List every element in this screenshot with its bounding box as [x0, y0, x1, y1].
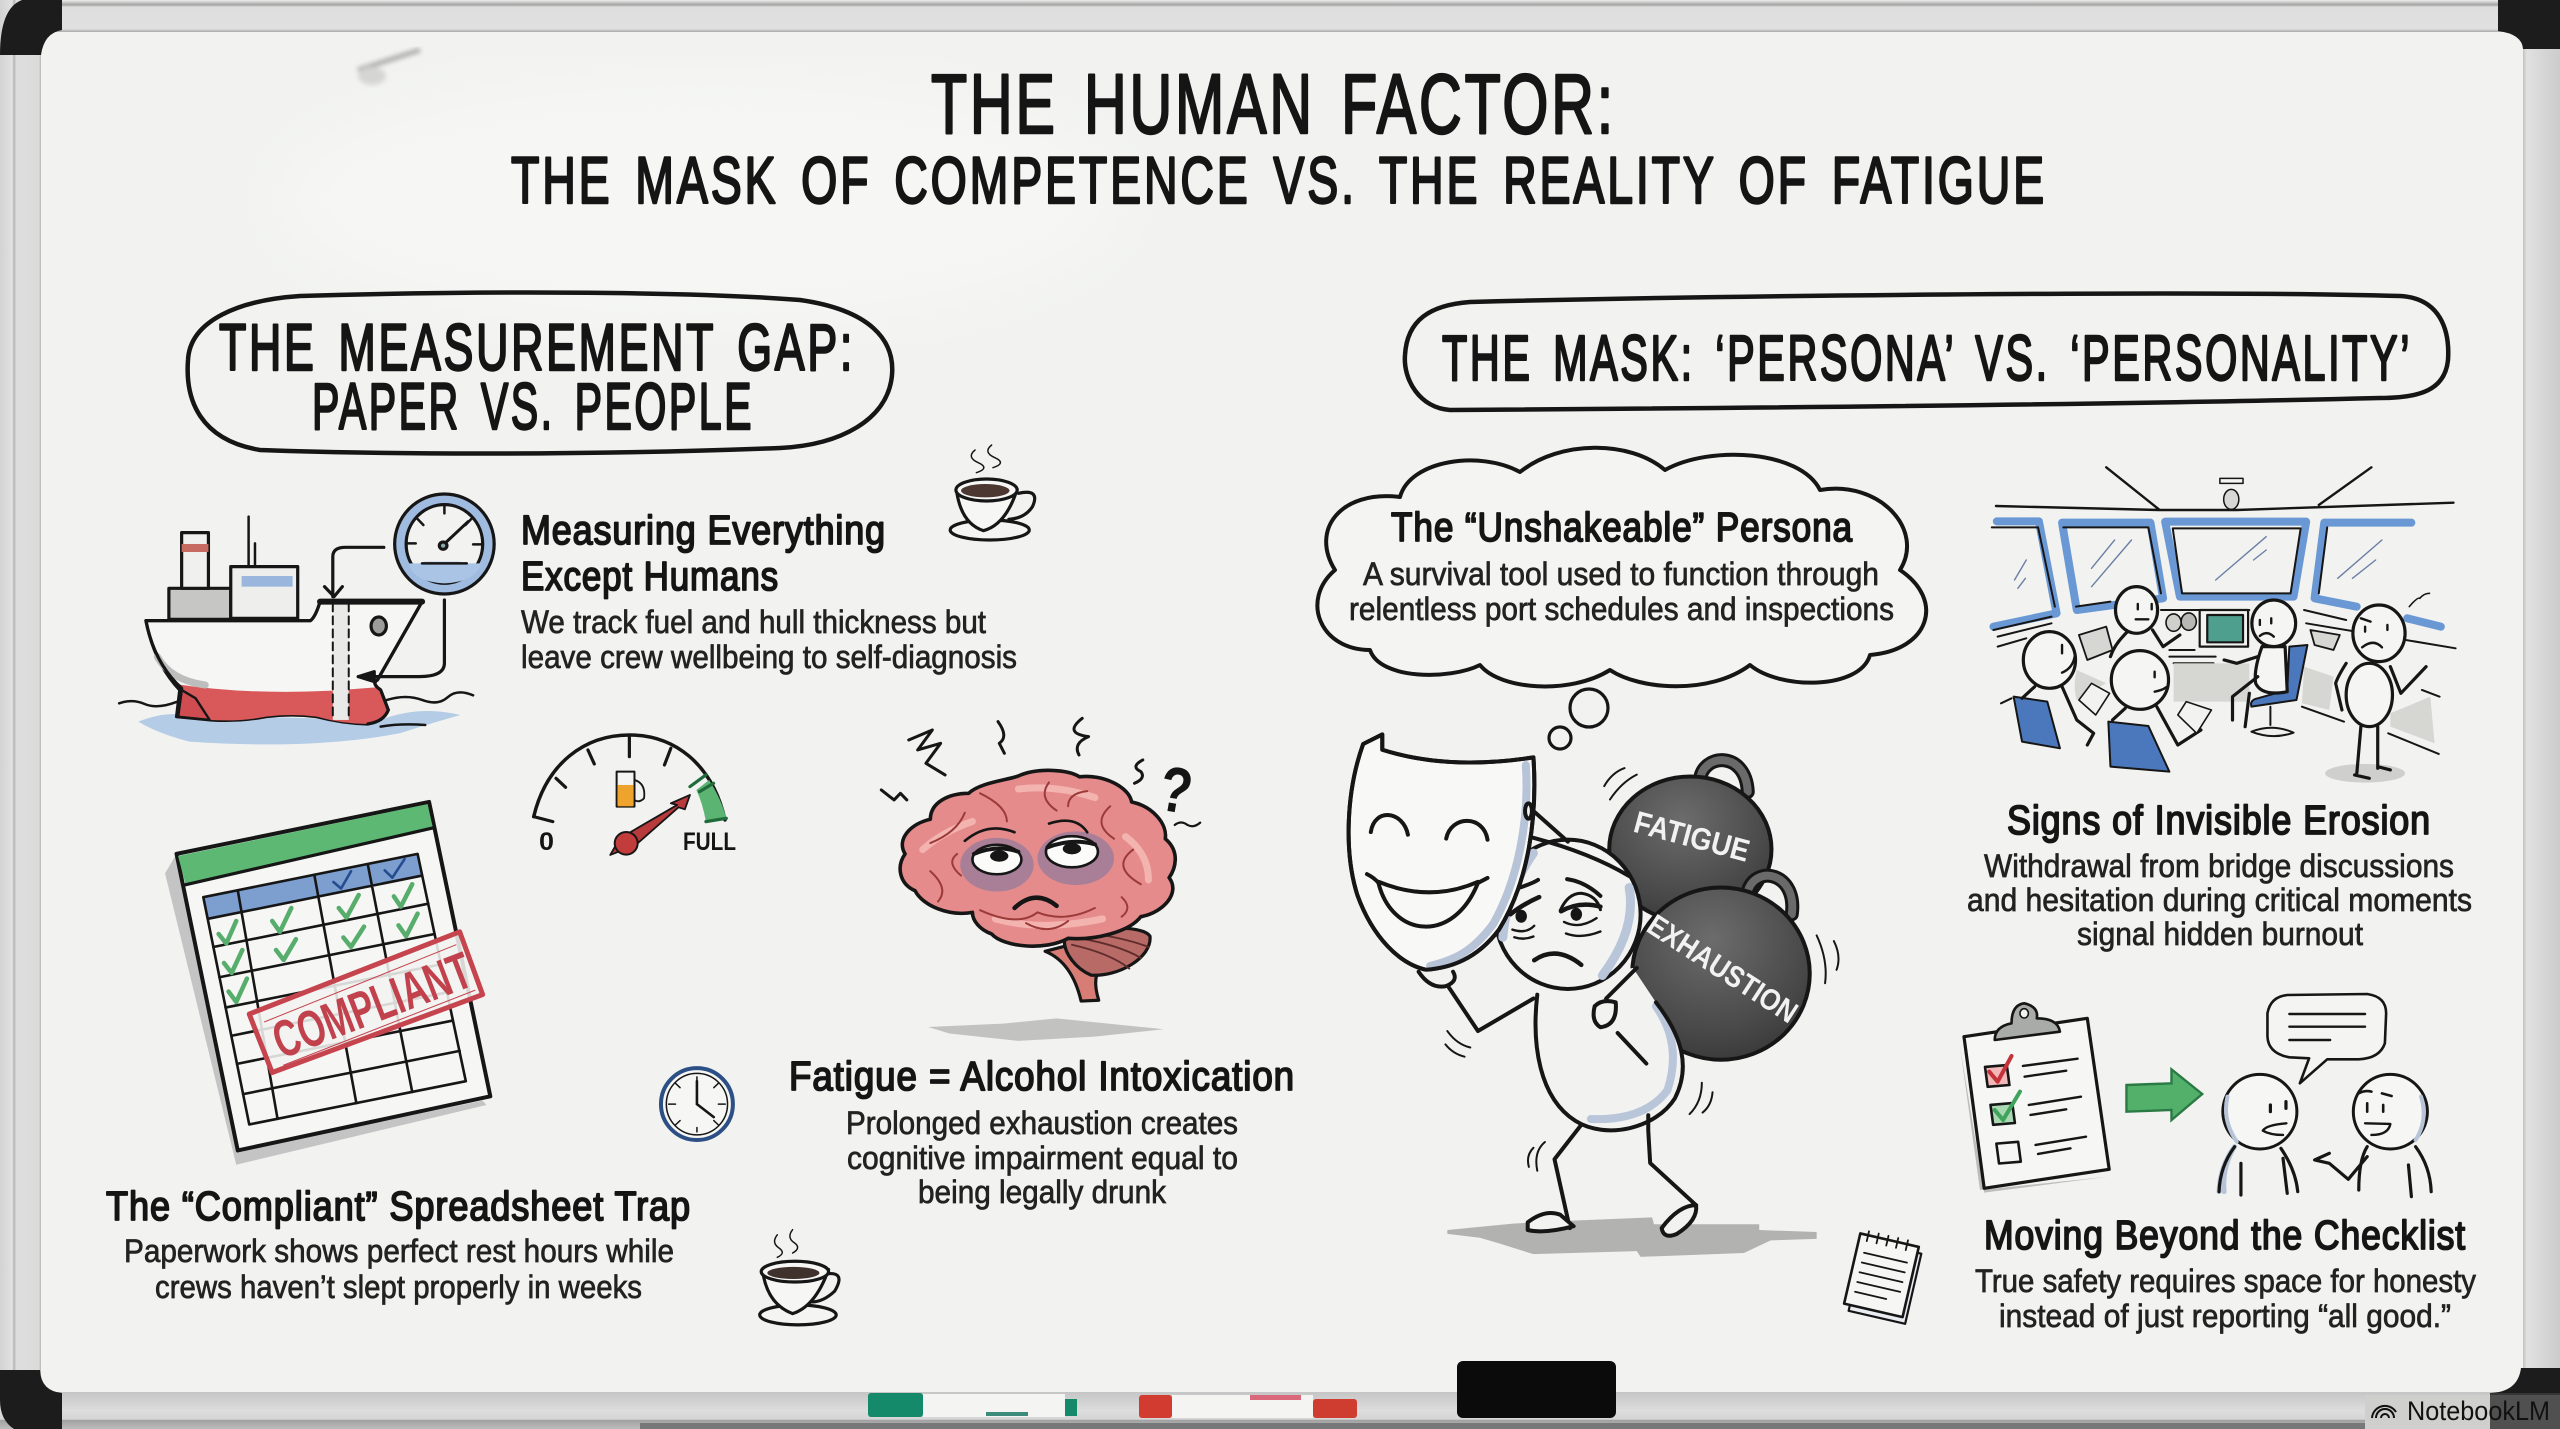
crew: seated right — [2224, 600, 2307, 736]
text: fatigue equals alcohol: cognitive impairment equal to — [847, 1140, 1238, 1176]
text: moving beyond the checklist: True safety requires space for honesty — [1975, 1263, 2476, 1299]
stamp label: COMPLIANT — [265, 942, 480, 1070]
weight labels — [1630, 804, 1803, 1030]
bridge windows — [1993, 521, 2441, 627]
arrow: checklist to conversation — [2126, 1069, 2202, 1120]
text: compliant spreadsheet trap: The “Compliant” Spreadsheet Trap — [106, 1183, 691, 1229]
text: measuring everything: We track fuel and hull thickness but — [521, 604, 986, 640]
icon: hull thickness gauge — [395, 494, 494, 594]
weight labels: EXHAUSTION — [1641, 909, 1803, 1030]
crew: standing — [2325, 593, 2429, 783]
icon: clipboard checklist — [1960, 1003, 2109, 1193]
text: moving beyond the checklist: Moving Beyond the Checklist — [1984, 1212, 2466, 1258]
NotebookLM badge — [2365, 1393, 2560, 1429]
icon: clock — [661, 1068, 733, 1140]
head — [1495, 840, 1641, 989]
red marker — [1139, 1395, 1357, 1418]
weight labels: FATIGUE — [1630, 804, 1753, 869]
text: measuring everything: Except Humans — [521, 553, 779, 599]
green marker — [868, 1393, 1077, 1417]
weight: exhaustion — [1632, 876, 1810, 1060]
fuel gauge labels — [539, 828, 736, 856]
icon: notepad — [1843, 1230, 1924, 1324]
crew: seated left front — [2014, 632, 2211, 772]
text: fatigue equals alcohol: being legally drunk — [918, 1174, 1167, 1210]
illustration: figure with mask and weights — [1349, 734, 1839, 1257]
thought bubble: The “Unshakeable” Persona — [1391, 504, 1853, 550]
text: fatigue equals alcohol — [789, 1053, 1295, 1210]
text: compliant spreadsheet trap: crews haven’t slept properly in weeks — [155, 1269, 642, 1305]
thought bubble: relentless port schedules and inspections — [1349, 591, 1894, 627]
text: measuring everything: leave crew wellbeing to self-diagnosis — [521, 639, 1017, 675]
text: signs of invisible erosion: and hesitation during critical moments — [1967, 882, 2472, 918]
text: compliant spreadsheet trap — [106, 1183, 691, 1305]
eraser smudge — [358, 50, 420, 85]
weight: fatigue — [1609, 760, 1771, 922]
title — [511, 57, 2047, 217]
text: moving beyond the checklist — [1975, 1212, 2476, 1334]
text: signs of invisible erosion: Signs of Invisible Erosion — [2007, 797, 2431, 843]
section heading: measurement gap: PAPER VS. PEOPLE — [312, 369, 754, 443]
section heading: measurement gap — [188, 293, 892, 454]
icon: question mark: ? — [1154, 752, 1198, 828]
icon: ship with hull gauge — [119, 517, 473, 744]
illustration: crew on ship bridge — [1992, 467, 2456, 783]
text: measuring everything: Measuring Everything — [521, 507, 886, 553]
crew: seated center back — [2110, 587, 2180, 657]
thought bubble: A survival tool used to function through — [1363, 556, 1879, 592]
text: fatigue equals alcohol: Fatigue = Alcohol Intoxication — [789, 1053, 1295, 1099]
eraser — [1457, 1361, 1616, 1418]
icon: coffee cup bottom — [760, 1230, 839, 1325]
icon: two people talking — [2219, 994, 2431, 1197]
icon: fuel gauge — [534, 735, 726, 855]
section heading: the mask — [1405, 294, 2448, 410]
NotebookLM badge: NotebookLM — [2407, 1396, 2550, 1426]
fuel gauge labels: FULL — [683, 828, 736, 856]
text: signs of invisible erosion — [1967, 797, 2472, 952]
icon: compliant spreadsheet — [165, 802, 490, 1165]
body — [1536, 968, 1683, 1130]
text: signs of invisible erosion: signal hidden burnout — [2077, 916, 2363, 952]
text: moving beyond the checklist: instead of just reporting “all good.” — [1999, 1298, 2451, 1334]
text: signs of invisible erosion: Withdrawal from bridge discussions — [1984, 848, 2454, 884]
icon: tired brain — [900, 770, 1175, 1041]
title: THE HUMAN FACTOR: — [931, 57, 1616, 151]
icon: coffee cup top — [950, 445, 1035, 540]
section heading: measurement gap: THE MEASUREMENT GAP: — [219, 310, 855, 384]
text: measuring everything — [521, 507, 1017, 675]
fuel gauge labels: 0 — [539, 828, 554, 856]
icon: brain confusion squiggles — [881, 718, 1200, 826]
mask — [1349, 734, 1534, 970]
text: compliant spreadsheet trap: Paperwork shows perfect rest hours while — [124, 1233, 674, 1269]
text: fatigue equals alcohol: Prolonged exhaustion creates — [846, 1105, 1238, 1141]
thought bubble — [1317, 448, 1926, 749]
